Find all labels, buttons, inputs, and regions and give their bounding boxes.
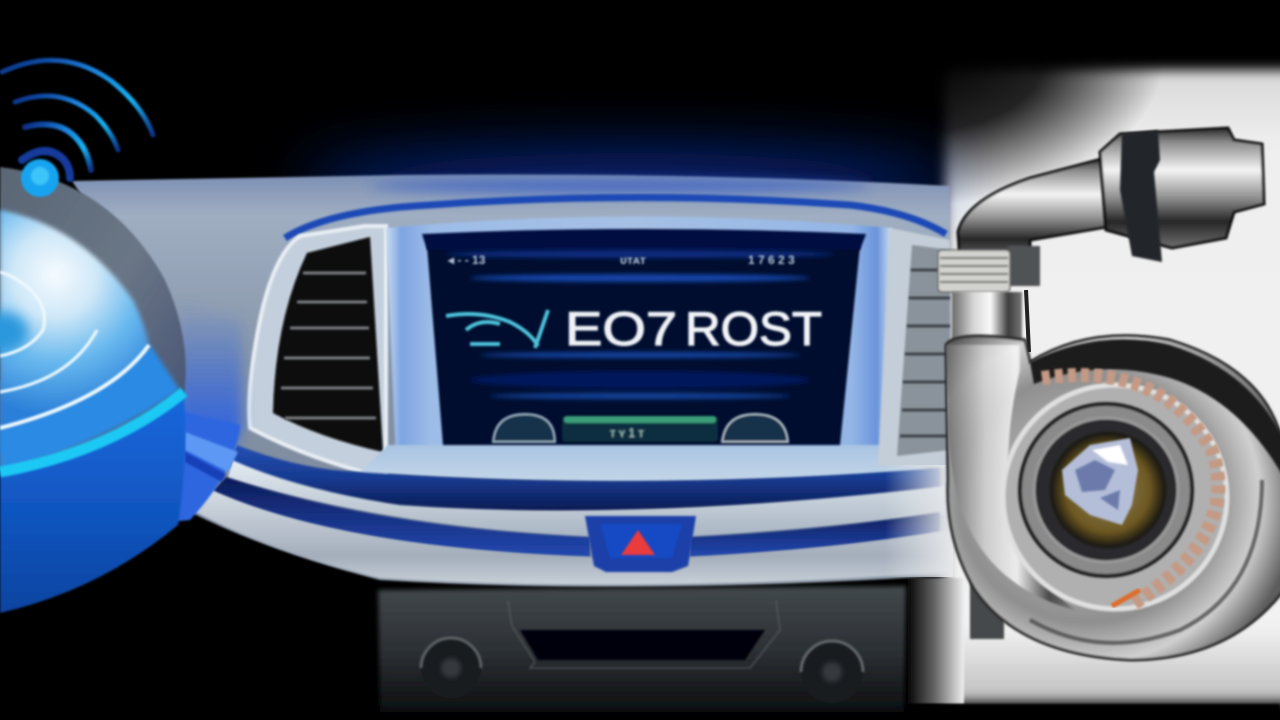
screen light bands <box>445 250 835 399</box>
turbocharger <box>938 128 1280 660</box>
bottom gauges <box>493 414 788 442</box>
right band fade <box>885 465 953 577</box>
sphere blue spot <box>0 312 28 352</box>
left knob <box>421 638 481 698</box>
inner spiral ring <box>1003 385 1227 609</box>
left wall of volute <box>946 345 1075 610</box>
turbine core <box>1050 432 1166 548</box>
hazard triangle <box>621 530 655 555</box>
sphere rim glass <box>0 167 186 470</box>
sphere cyan rim <box>0 392 184 472</box>
bracket under housing <box>970 565 1004 639</box>
dashboard body <box>72 174 953 587</box>
bottom gauges: ᴛ ʏ 1 ᴛ <box>610 426 644 440</box>
translucent blue edge over dashboard <box>170 300 242 522</box>
centre console <box>378 586 906 712</box>
signal dot <box>21 159 59 197</box>
dark inner rings <box>1020 404 1192 576</box>
screen title word: ROST <box>685 302 822 355</box>
white band <box>228 460 945 537</box>
glass sphere with blue base <box>0 167 242 613</box>
status bar: ◂ ‑ ‑ 13 <box>447 253 486 267</box>
screen title: EO7 <box>565 302 677 355</box>
right air vent <box>897 245 950 456</box>
copper dotted ring <box>1042 375 1218 606</box>
orange accent <box>1112 590 1140 606</box>
top trim <box>285 198 946 238</box>
outlet elbow pipe <box>958 158 1112 262</box>
status bar: ᴜᴛᴀᴛ <box>620 253 646 267</box>
right vent surround <box>878 228 950 468</box>
sphere bright dome <box>0 210 150 455</box>
threaded collar <box>938 246 1040 292</box>
blue stripe <box>212 477 590 557</box>
left air vent <box>273 237 383 452</box>
upper blue trim <box>228 445 940 512</box>
car outline <box>446 310 548 348</box>
left vent surround <box>249 226 386 478</box>
clamp band <box>1120 130 1162 262</box>
right knob <box>801 641 863 703</box>
icon: wireless signal <box>2 60 153 197</box>
bottom silver band <box>192 490 950 585</box>
status bar <box>447 253 795 267</box>
volute housing <box>946 336 1280 660</box>
console slot <box>520 630 765 660</box>
screen bezel <box>386 216 892 462</box>
outer spiral highlight <box>1030 480 1262 643</box>
top blue sheen <box>370 180 870 192</box>
hazard button <box>585 516 696 572</box>
sphere mid blue <box>0 345 180 472</box>
sphere lower body <box>0 380 185 613</box>
bottom edge shadow <box>905 704 1280 720</box>
sphere light rings <box>0 272 149 428</box>
status bar: 1 7 6 2 3 <box>748 253 795 267</box>
volute dark upper rim <box>1030 339 1280 478</box>
panel under screen <box>360 445 930 482</box>
vertical pipe <box>952 292 1022 348</box>
outlet sleeve <box>1100 128 1264 248</box>
bright backdrop behind turbo <box>880 40 1280 704</box>
blue glow above dashboard <box>300 152 960 212</box>
display screen <box>422 229 866 445</box>
